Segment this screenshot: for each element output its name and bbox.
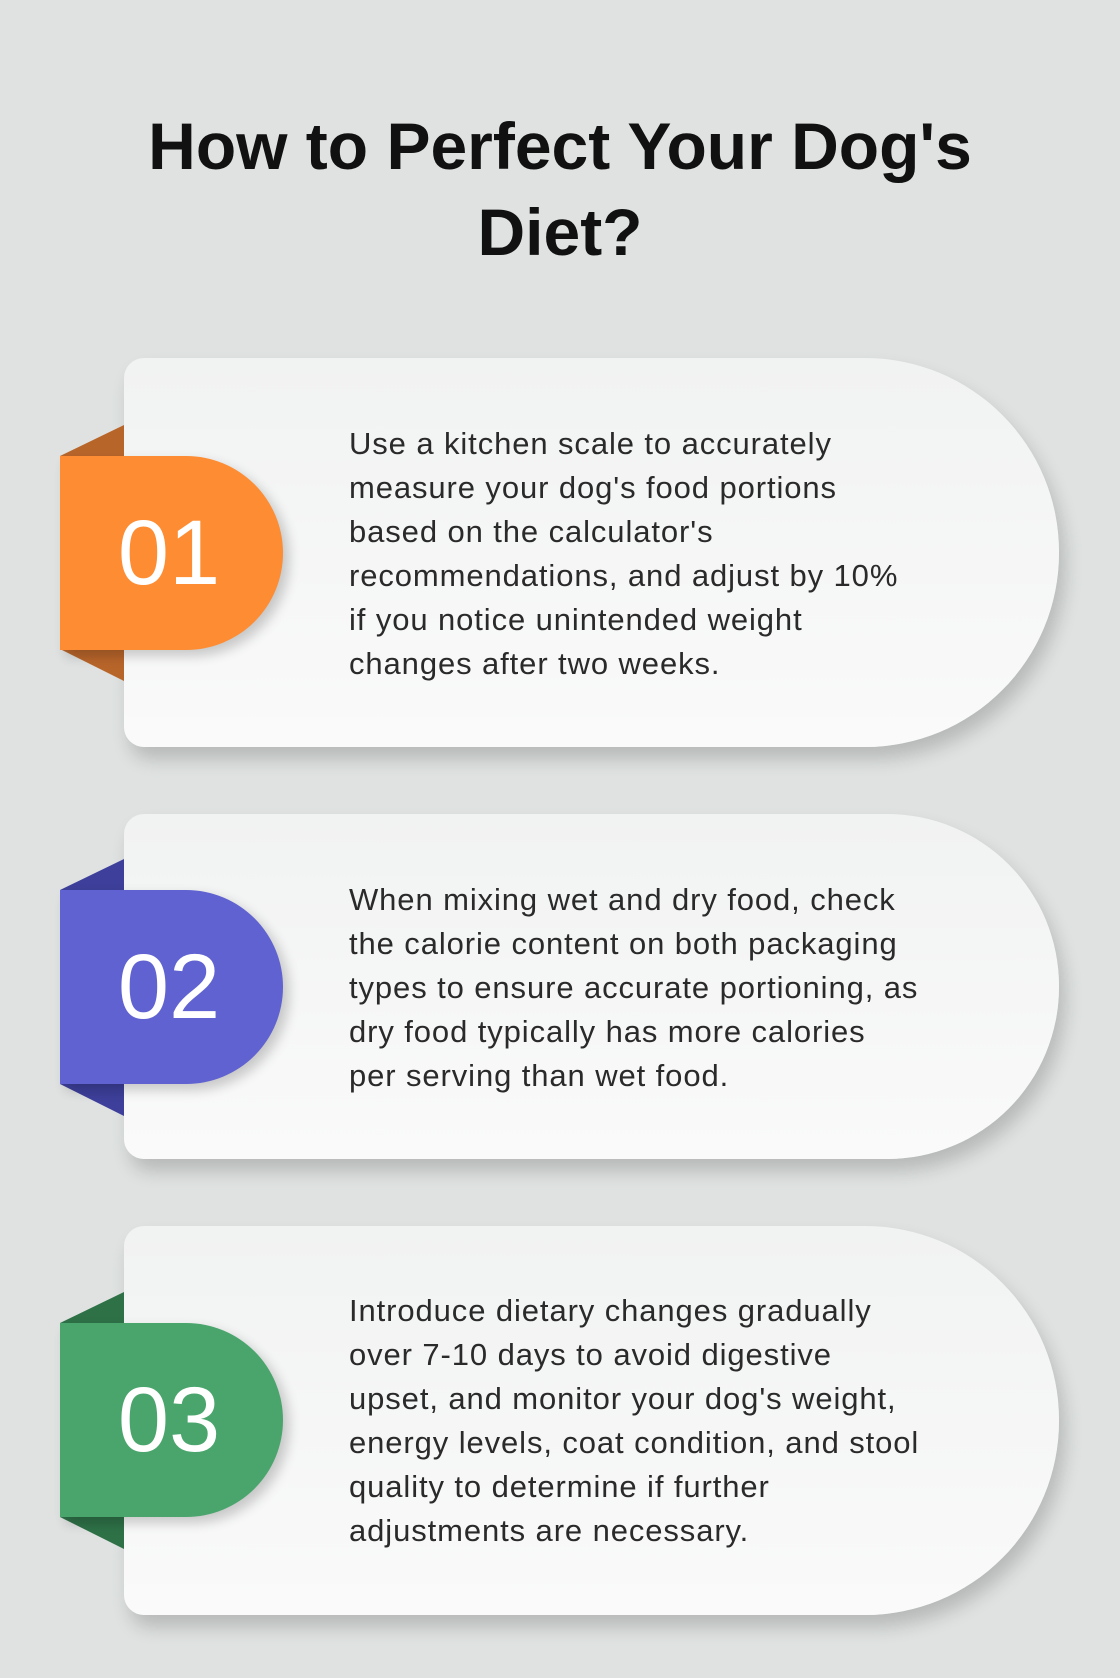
text: step 1: changes after two weeks. — [349, 646, 720, 681]
text: step 3: quality to determine if further — [349, 1469, 770, 1504]
text: step 3: over 7-10 days to avoid digestive — [349, 1337, 832, 1372]
text: step 3: adjustments are necessary. — [349, 1513, 749, 1548]
panel: step 2 card — [124, 814, 1059, 1159]
text: step 3: upset, and monitor your dog's weight, — [349, 1381, 897, 1416]
text: step 1: recommendations, and adjust by 10% — [349, 558, 898, 593]
badge: 03: 03 — [118, 1369, 220, 1471]
text: step 3: Introduce dietary changes gradually — [349, 1293, 872, 1328]
title: How to Perfect Your Dog's — [148, 109, 972, 183]
badge: 03 — [60, 1323, 283, 1517]
panel: step 3 card — [124, 1226, 1059, 1615]
badge: 02: 02 — [118, 936, 220, 1038]
fold: step 1 top — [60, 425, 124, 456]
fold: step 1 bottom — [62, 650, 124, 681]
text: step 1: Use a kitchen scale to accurately — [349, 426, 832, 461]
text: step 3: energy levels, coat condition, and stool — [349, 1425, 919, 1460]
text: step 2: types to ensure accurate portioning, as — [349, 970, 918, 1005]
title: Diet? — [478, 195, 642, 269]
panel: step 1 card — [124, 358, 1059, 747]
fold: step 2 top — [60, 859, 124, 890]
text: step 1: if you notice unintended weight — [349, 602, 803, 637]
badge: 02 — [60, 890, 283, 1084]
badge: 01: 01 — [118, 502, 220, 604]
text: step 2: the calorie content on both packaging — [349, 926, 898, 961]
text: step 1: based on the calculator's — [349, 514, 713, 549]
fold: step 3 top — [60, 1292, 124, 1323]
text: step 1 — [349, 426, 898, 681]
badge: 01 — [60, 456, 283, 650]
text: step 2: dry food typically has more calories — [349, 1014, 866, 1049]
text: step 1: measure your dog's food portions — [349, 470, 837, 505]
fold: step 3 bottom — [60, 1517, 124, 1549]
text: step 3 — [349, 1293, 919, 1548]
fold: step 2 bottom — [60, 1084, 124, 1116]
text: step 2: When mixing wet and dry food, check — [349, 882, 896, 917]
text: step 2: per serving than wet food. — [349, 1058, 729, 1093]
title — [148, 109, 972, 269]
text: step 2 — [349, 882, 918, 1093]
